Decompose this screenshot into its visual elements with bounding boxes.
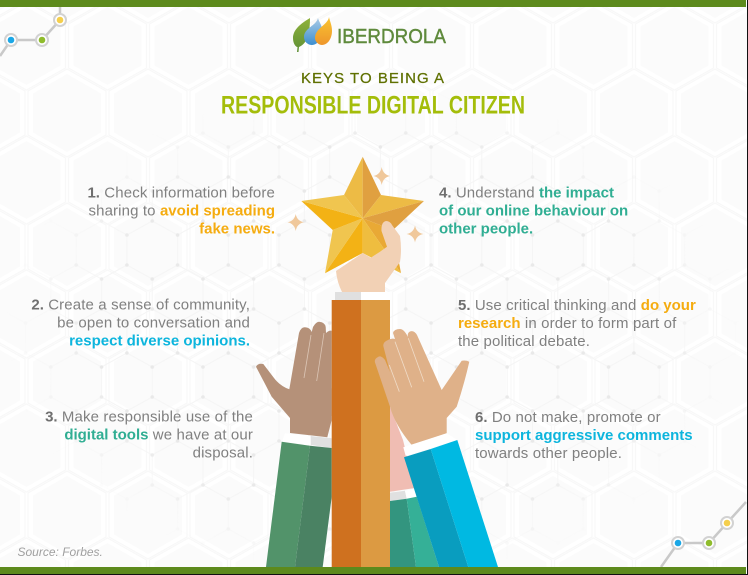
text 3: 3. Make responsible use of the <box>45 409 253 426</box>
pink arm <box>390 407 415 492</box>
icon: logo leaves <box>293 17 332 52</box>
blue sleeve dark <box>404 449 468 567</box>
cuff centre <box>335 292 390 300</box>
logo <box>293 17 447 52</box>
text 1: 1. Check information before <box>87 185 275 202</box>
top bar <box>0 0 746 7</box>
text 5: research in order to form part of <box>458 315 676 332</box>
text 1: fake news. <box>199 221 275 238</box>
finger lines <box>304 333 324 381</box>
green sleeve dark <box>295 446 332 567</box>
text 6: towards other people. <box>475 445 622 462</box>
green sleeve light <box>266 442 310 567</box>
tan hand <box>375 329 469 445</box>
finger lines <box>389 338 424 392</box>
text 2: be open to conversation and <box>57 315 250 332</box>
white cuff <box>403 433 457 456</box>
text 3: digital tools we have at our <box>64 427 253 444</box>
text 6: support aggressive comments <box>475 427 693 444</box>
right arm <box>375 329 498 567</box>
icon: sparkles <box>288 167 424 242</box>
text 6: 6. Do not make, promote or <box>475 409 661 426</box>
brown hand <box>256 322 332 437</box>
podium bars <box>332 300 390 567</box>
text 2: 2. Create a sense of community, <box>31 297 250 314</box>
icon: star <box>301 157 424 273</box>
white cuff <box>282 433 311 445</box>
left arm <box>256 322 332 567</box>
text 2: respect diverse opinions. <box>69 333 250 350</box>
blue sleeve light <box>431 440 498 567</box>
teal sleeve light <box>407 497 439 567</box>
teal sleeve dark <box>390 499 416 567</box>
source: Source: Forbes. <box>18 545 103 559</box>
text 3: disposal. <box>193 445 253 462</box>
background <box>24 102 712 545</box>
illustration: star, hands and podium <box>256 157 498 567</box>
text 4: 4. Understand the impact <box>439 185 614 202</box>
white cuff <box>405 488 417 499</box>
text 5: 5. Use critical thinking and do your <box>458 297 696 314</box>
logo wordmark: IBERDROLA <box>337 26 447 48</box>
skin sliver <box>326 388 332 416</box>
icon: network nodes bottom right <box>661 502 746 567</box>
subtitle: KEYS TO BEING A <box>301 70 444 87</box>
text 4: other people. <box>439 221 533 238</box>
title: RESPONSIBLE DIGITAL CITIZEN <box>221 92 525 120</box>
bottom bar <box>0 567 746 574</box>
text 4: of our online behaviour on <box>439 203 628 220</box>
icon: network nodes top left <box>0 7 66 56</box>
text 5: the political debate. <box>458 333 590 350</box>
text 1: sharing to avoid spreading <box>88 203 275 220</box>
grey cuff <box>311 436 332 448</box>
pink arm and teal sleeve <box>390 407 439 567</box>
grey cuff <box>390 491 407 501</box>
icon: raised hand holding star <box>336 221 401 292</box>
